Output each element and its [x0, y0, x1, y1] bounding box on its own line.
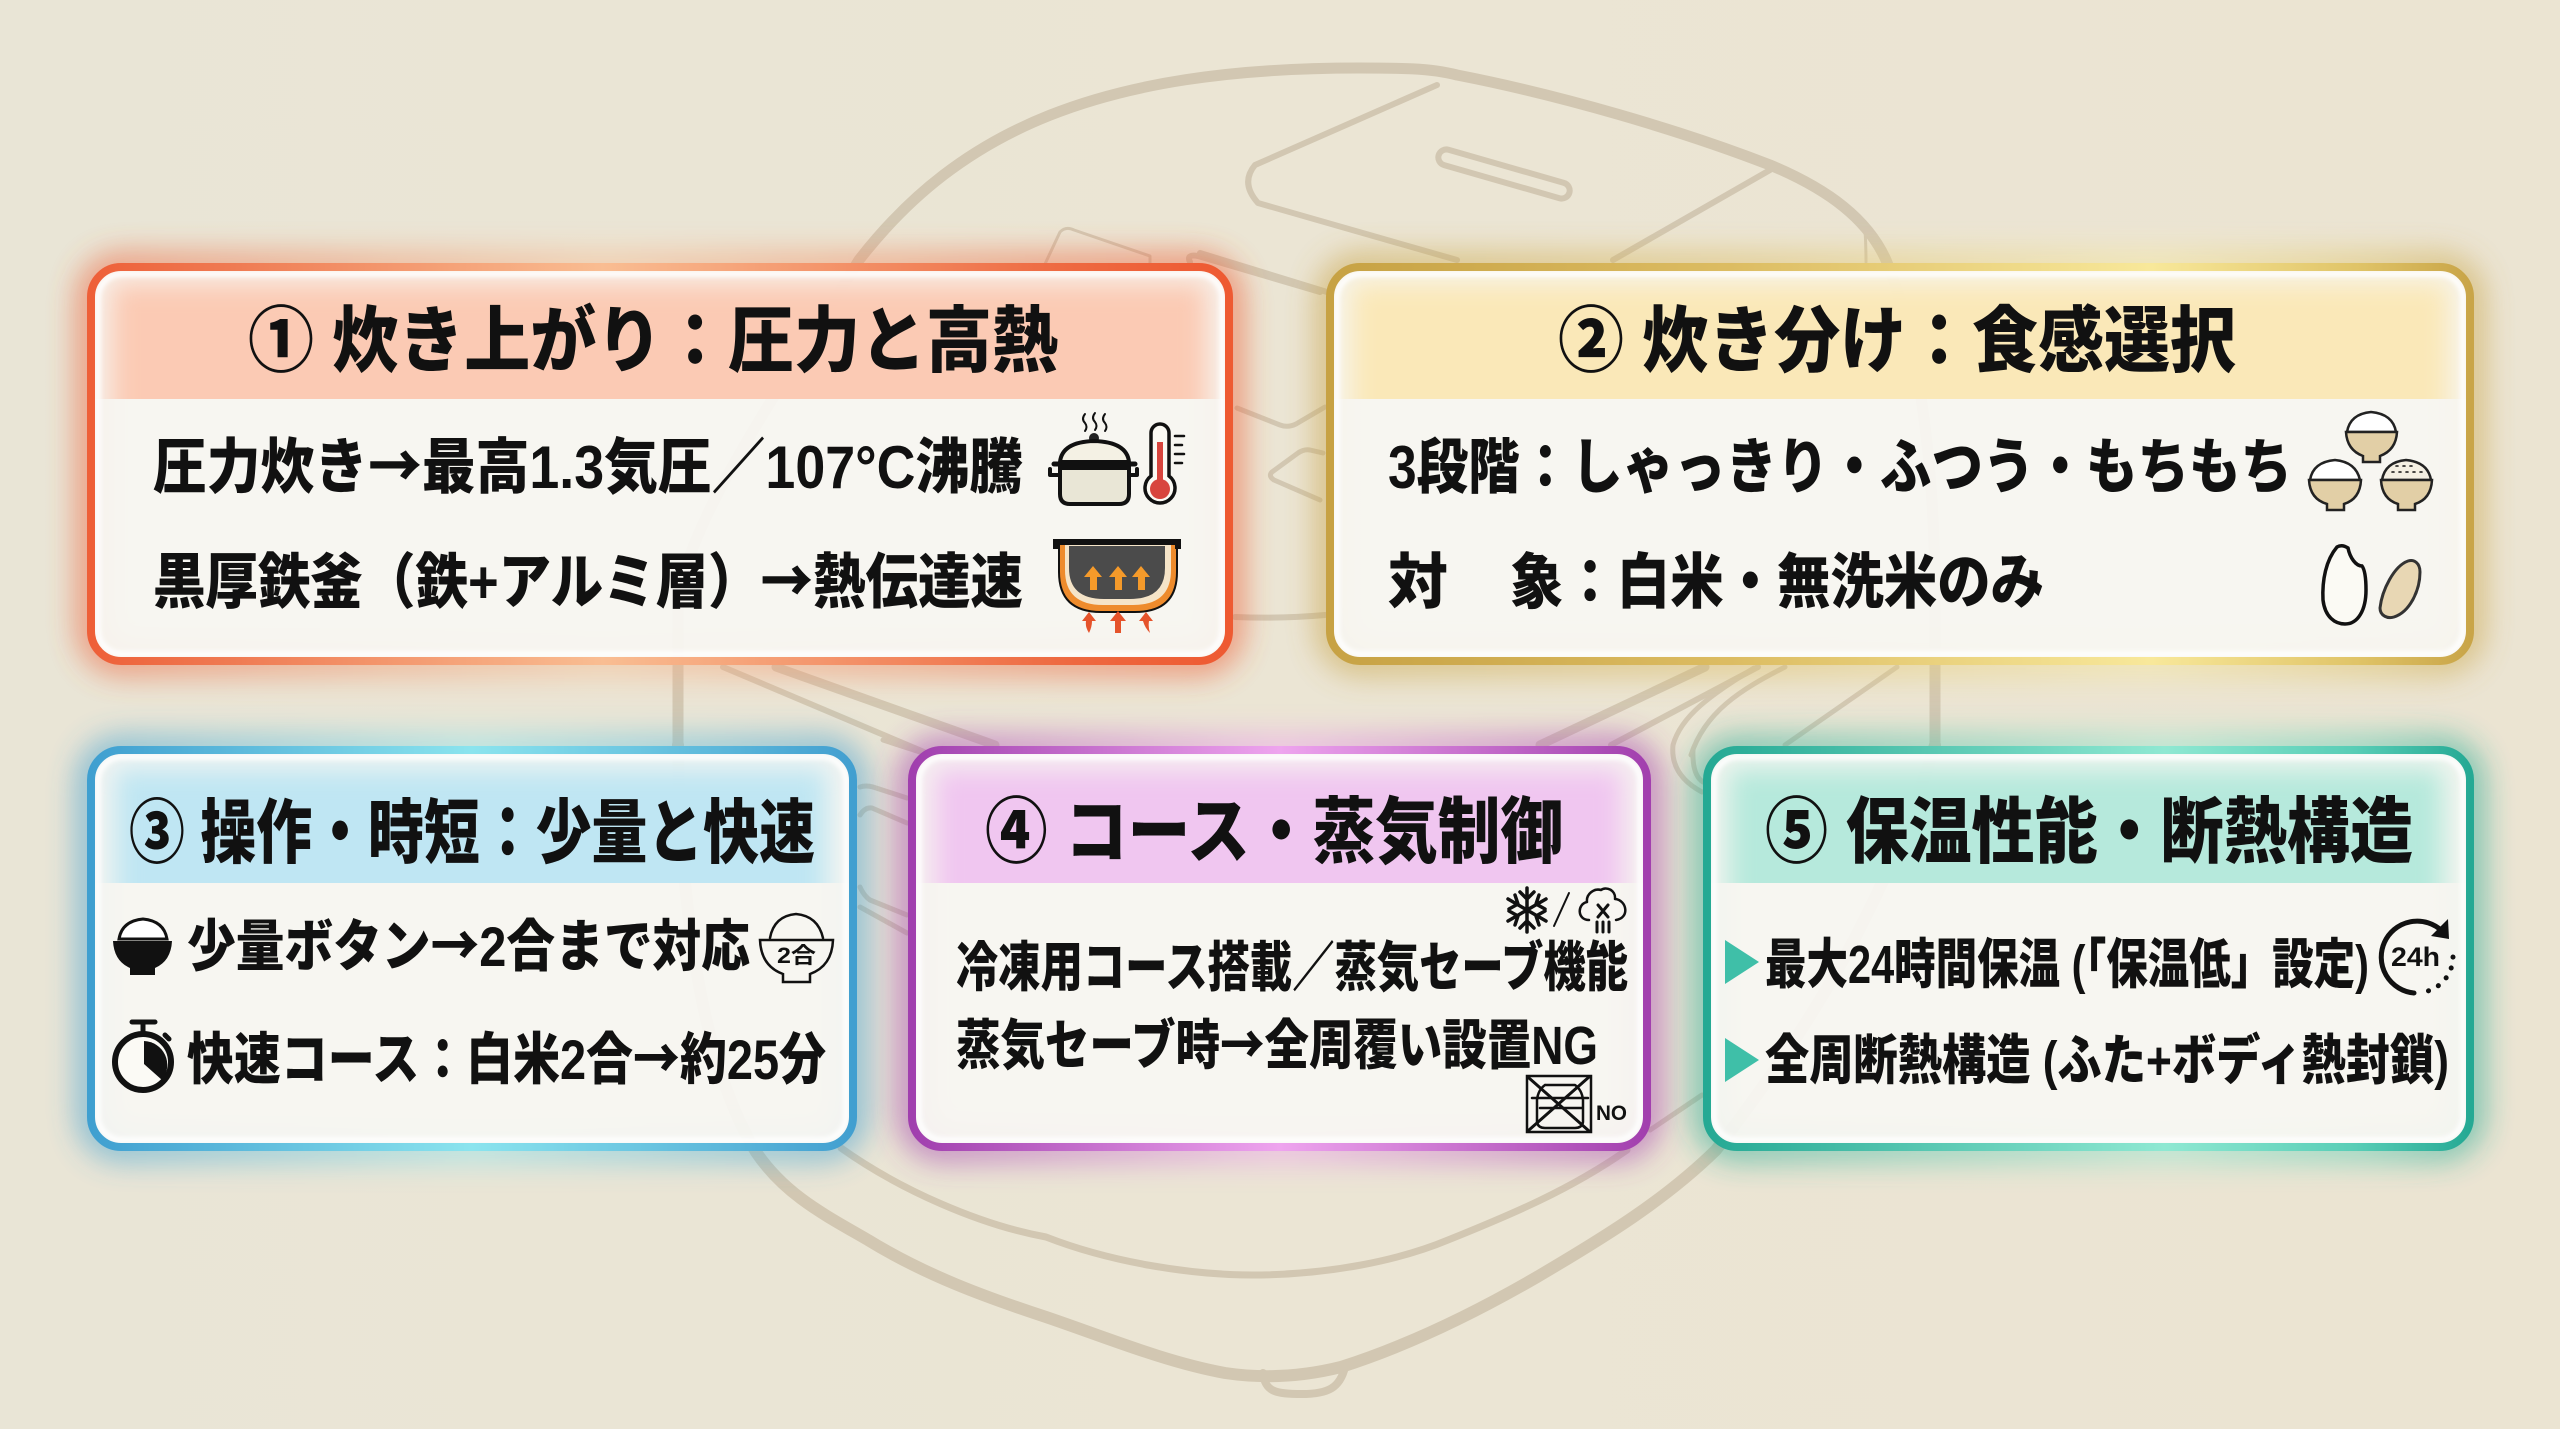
icon: steaming pot [1050, 413, 1137, 504]
text: 24 hour keep warm: 最大24時間保温 (「保温低」設定) [1765, 935, 2369, 995]
icon: 2-go rice bowl [760, 914, 833, 982]
lid handle [1436, 148, 1572, 200]
heading: ② 炊き分け：食感選択 [1558, 302, 2236, 382]
icon: bullet triangle [1725, 940, 1759, 984]
icon: steam cloud with cross [1580, 888, 1625, 932]
icon: stopwatch [115, 1022, 171, 1090]
icon: inner pot with heat arrows [1053, 539, 1181, 633]
label: NO: NO [1596, 1102, 1627, 1125]
text: three levels: 3段階：しゃっきり・ふつう・もちもち [1388, 434, 2292, 501]
text: quick course: 快速コース：白米2合→約25分 [187, 1015, 826, 1096]
icon: three rice bowls [2309, 412, 2432, 510]
icon: slash [1554, 893, 1569, 926]
lid panel [1248, 85, 1457, 260]
text: steam save warning: 蒸気セーブ時→全周覆い設置NG [956, 1001, 1598, 1080]
icon: rice grains [2323, 546, 2420, 624]
heading: ④ コース・蒸気制御 [985, 793, 1563, 873]
label: 2合: 2合 [777, 943, 816, 968]
icon: black rice bowl [113, 919, 172, 975]
panel: ③ operation and time saving [91, 750, 853, 1147]
icon: thermometer [1145, 424, 1184, 503]
text: black thick iron pot: 黒厚鉄釜（鉄+アルミ層）→熱伝達速 [153, 534, 1023, 621]
text: small amount button: 少量ボタン→2合まで対応 [187, 902, 750, 983]
icon: no covering sign [1527, 1076, 1627, 1132]
label: 24h: 24h [2391, 942, 2440, 972]
heading: ① 炊き上がり：圧力と高熱 [248, 302, 1058, 382]
text: pressure cooking: 圧力炊き→最高1.3気圧／107°C沸騰 [153, 419, 1023, 506]
text: freezing course and steam save: 冷凍用コース搭載／蒸気セーブ機能 [956, 937, 1628, 998]
icon: bullet triangle [1725, 1038, 1759, 1082]
text: target rice: 象：白米・無洗米のみ [1510, 549, 2044, 616]
panel: ② texture selection [1330, 267, 2470, 661]
panel: ⑤ heat retention and insulation [1707, 750, 2470, 1147]
heading: ⑤ 保温性能・断熱構造 [1765, 793, 2413, 873]
panel: ④ course and steam control [912, 750, 1647, 1147]
icon: 24 hour clock [2381, 919, 2453, 993]
panel: ① cooking, pressure and high heat [91, 267, 1229, 661]
icon: snowflake [1508, 888, 1546, 932]
background illustration: rice cooker outline [678, 68, 1935, 1394]
text: target rice: 対 [1388, 549, 1508, 616]
heading: ③ 操作・時短：少量と快速 [129, 794, 815, 872]
